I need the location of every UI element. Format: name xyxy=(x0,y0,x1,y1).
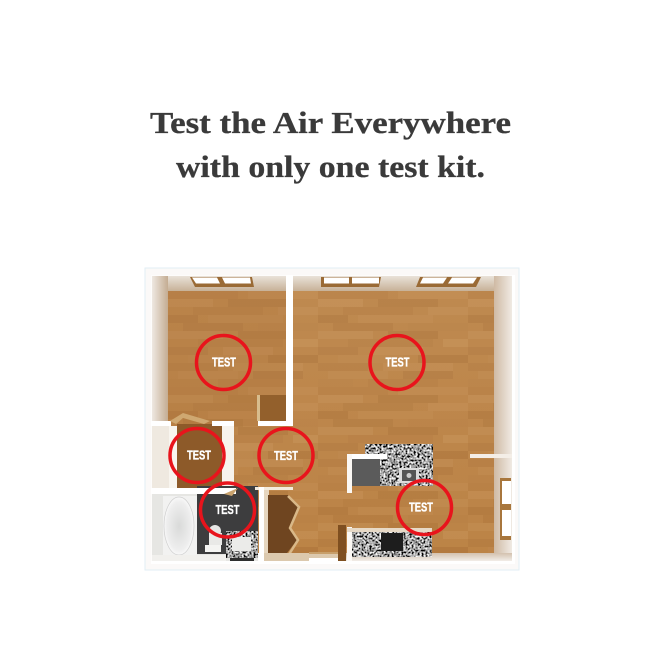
pantry closet xyxy=(259,487,338,563)
title: Test the Air Everywhere xyxy=(150,105,511,140)
test marker: hallway: TEST xyxy=(274,448,298,463)
test marker: bathroom: TEST xyxy=(216,502,240,517)
test marker: main room xyxy=(370,336,424,390)
test marker: kitchen xyxy=(398,480,452,534)
title: with only one test kit. xyxy=(176,149,485,184)
test marker: large left room xyxy=(196,336,250,390)
kitchen island xyxy=(347,444,433,493)
toilet xyxy=(205,525,222,552)
outer frame xyxy=(145,268,519,570)
right edge wall xyxy=(512,275,515,564)
test marker: large left room: TEST xyxy=(212,355,236,370)
sink xyxy=(399,468,419,483)
perimeter walls xyxy=(152,276,512,561)
test marker: kitchen: TEST xyxy=(409,499,433,514)
test marker: main room: TEST xyxy=(386,355,410,370)
wood floor xyxy=(168,291,494,553)
kitchen counter xyxy=(338,525,432,563)
hall closet xyxy=(257,395,293,426)
floor plan xyxy=(145,268,519,570)
upper closet xyxy=(151,413,234,489)
test marker: hallway xyxy=(259,428,313,482)
windows xyxy=(190,277,511,540)
wall stub xyxy=(470,454,512,458)
white wall top outline xyxy=(151,275,515,564)
test marker: closet xyxy=(170,428,224,482)
vanity xyxy=(226,531,258,562)
title xyxy=(150,105,511,184)
bathroom xyxy=(151,486,293,563)
central wall xyxy=(286,275,293,426)
bathtub xyxy=(164,497,194,555)
stove xyxy=(381,533,403,551)
test marker: closet: TEST xyxy=(187,447,211,462)
test marker: bathroom xyxy=(200,483,254,537)
